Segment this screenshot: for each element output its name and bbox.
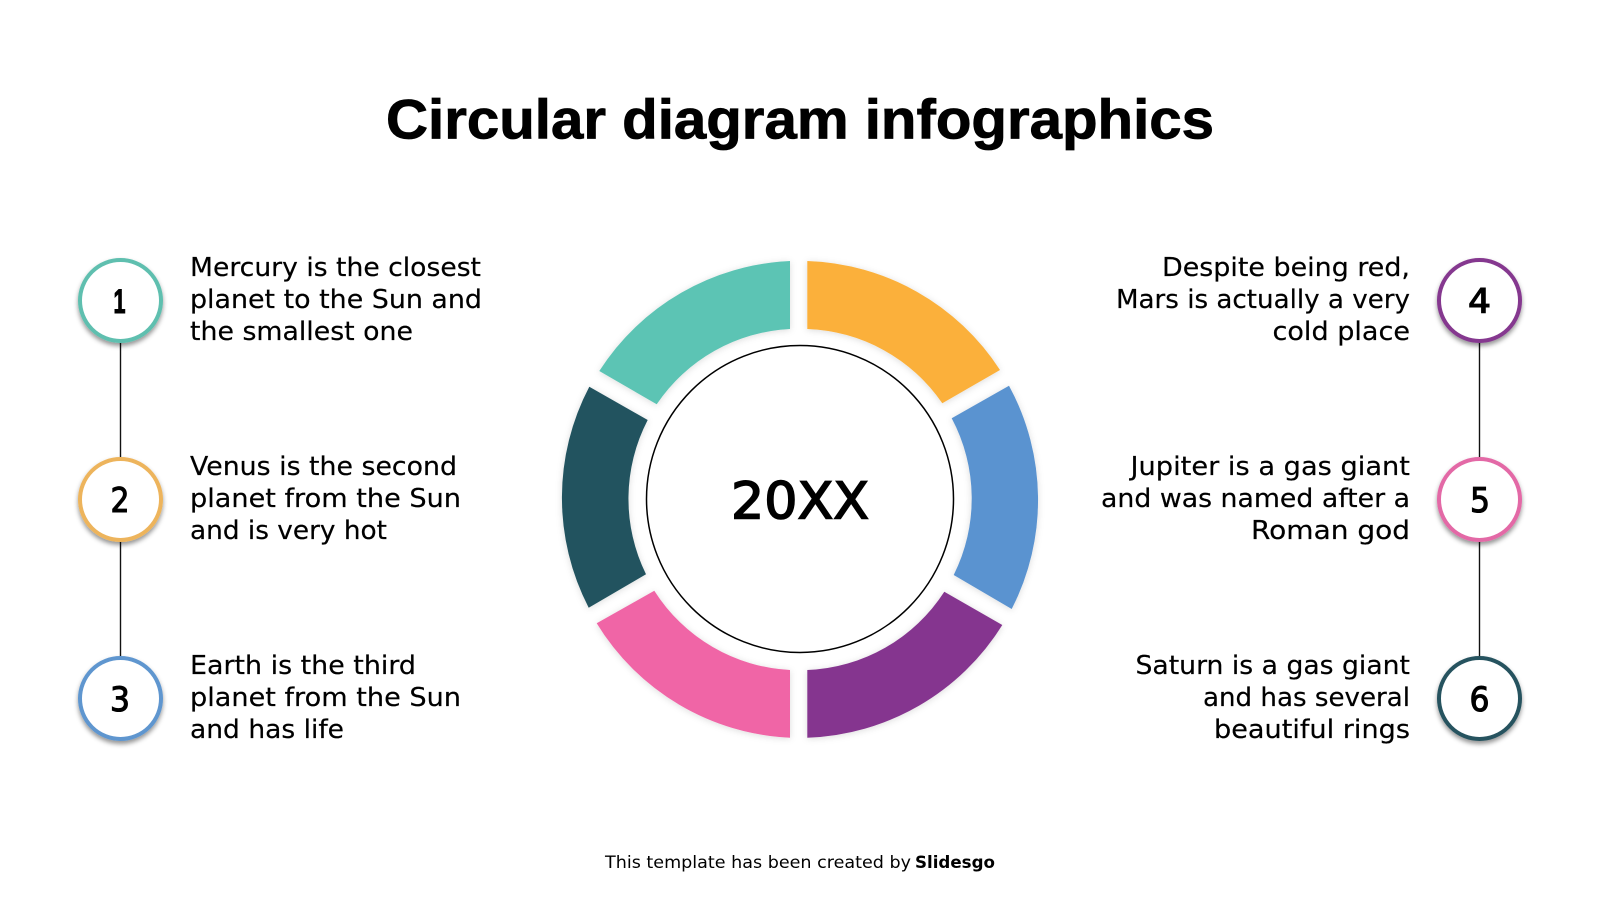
text: Saturn xyxy=(1136,651,1410,745)
segment: purple xyxy=(807,592,1002,738)
text: Mars: cold place xyxy=(1272,317,1410,347)
circular diagram xyxy=(562,261,1038,738)
text: Mercury: Mercury is the closest xyxy=(190,253,481,283)
text: Earth: Earth is the third xyxy=(190,651,416,681)
text: Jupiter: Jupiter is a gas giant xyxy=(1128,452,1410,482)
footer credit: Slidesgo xyxy=(915,853,995,873)
text: Saturn: Saturn is a gas giant xyxy=(1136,651,1410,681)
right connector lines xyxy=(1478,340,1480,659)
segment: dark teal xyxy=(562,387,648,608)
text: Mars: Despite being red, xyxy=(1162,253,1410,283)
text: Venus: and is very hot xyxy=(190,516,387,546)
segment: orange xyxy=(807,261,1000,403)
text: Saturn: beautiful rings xyxy=(1214,715,1410,745)
badge 2: 2 xyxy=(110,481,130,521)
title: Circular diagram infographics xyxy=(386,88,1214,150)
segment: teal xyxy=(599,261,790,404)
segment: blue xyxy=(952,386,1038,609)
segment: pink xyxy=(597,591,790,738)
text: Jupiter: Roman god xyxy=(1251,516,1410,546)
panel: item 1 Mercury xyxy=(80,253,482,347)
center circle xyxy=(646,346,954,652)
text: Venus: planet from the Sun xyxy=(190,484,461,514)
panel: item 3 Earth xyxy=(80,651,461,745)
text: Earth: and has life xyxy=(190,715,344,745)
text: Venus xyxy=(190,452,461,546)
center year: 20XX xyxy=(731,472,869,532)
text: Earth: planet from the Sun xyxy=(190,683,461,713)
panel: item 2 Venus xyxy=(80,452,461,546)
text: Jupiter: and was named after a xyxy=(1101,484,1410,514)
text: Mercury: the smallest one xyxy=(190,317,413,347)
badge 4: 4 xyxy=(1468,282,1491,322)
text: Mars xyxy=(1116,253,1410,347)
ring segments xyxy=(562,261,1038,738)
panel: item 6 Saturn xyxy=(1136,651,1520,745)
badge 6: 6 xyxy=(1470,680,1490,720)
badge 5 xyxy=(1439,459,1520,540)
text: Earth xyxy=(190,651,461,745)
badge 5: 5 xyxy=(1470,481,1490,521)
text: Jupiter xyxy=(1101,452,1410,546)
badge 1 xyxy=(80,260,161,341)
badge 3: 3 xyxy=(110,680,130,720)
panel: item 4 Mars xyxy=(1116,253,1520,347)
text: Mars: Mars is actually a very xyxy=(1116,285,1410,315)
badge 6 xyxy=(1439,658,1520,739)
badge 3 xyxy=(80,658,161,739)
footer credit: This template has been created by xyxy=(604,853,911,873)
text: Saturn: and has several xyxy=(1203,683,1410,713)
badge 4 xyxy=(1439,260,1520,341)
badge 2 xyxy=(80,459,161,540)
left connector lines xyxy=(120,340,122,659)
badge 1: 1 xyxy=(114,283,126,321)
panel: item 5 Jupiter xyxy=(1101,452,1520,546)
text: Mercury xyxy=(190,253,482,347)
text: Mercury: planet to the Sun and xyxy=(190,285,482,315)
text: Venus: Venus is the second xyxy=(190,452,457,482)
